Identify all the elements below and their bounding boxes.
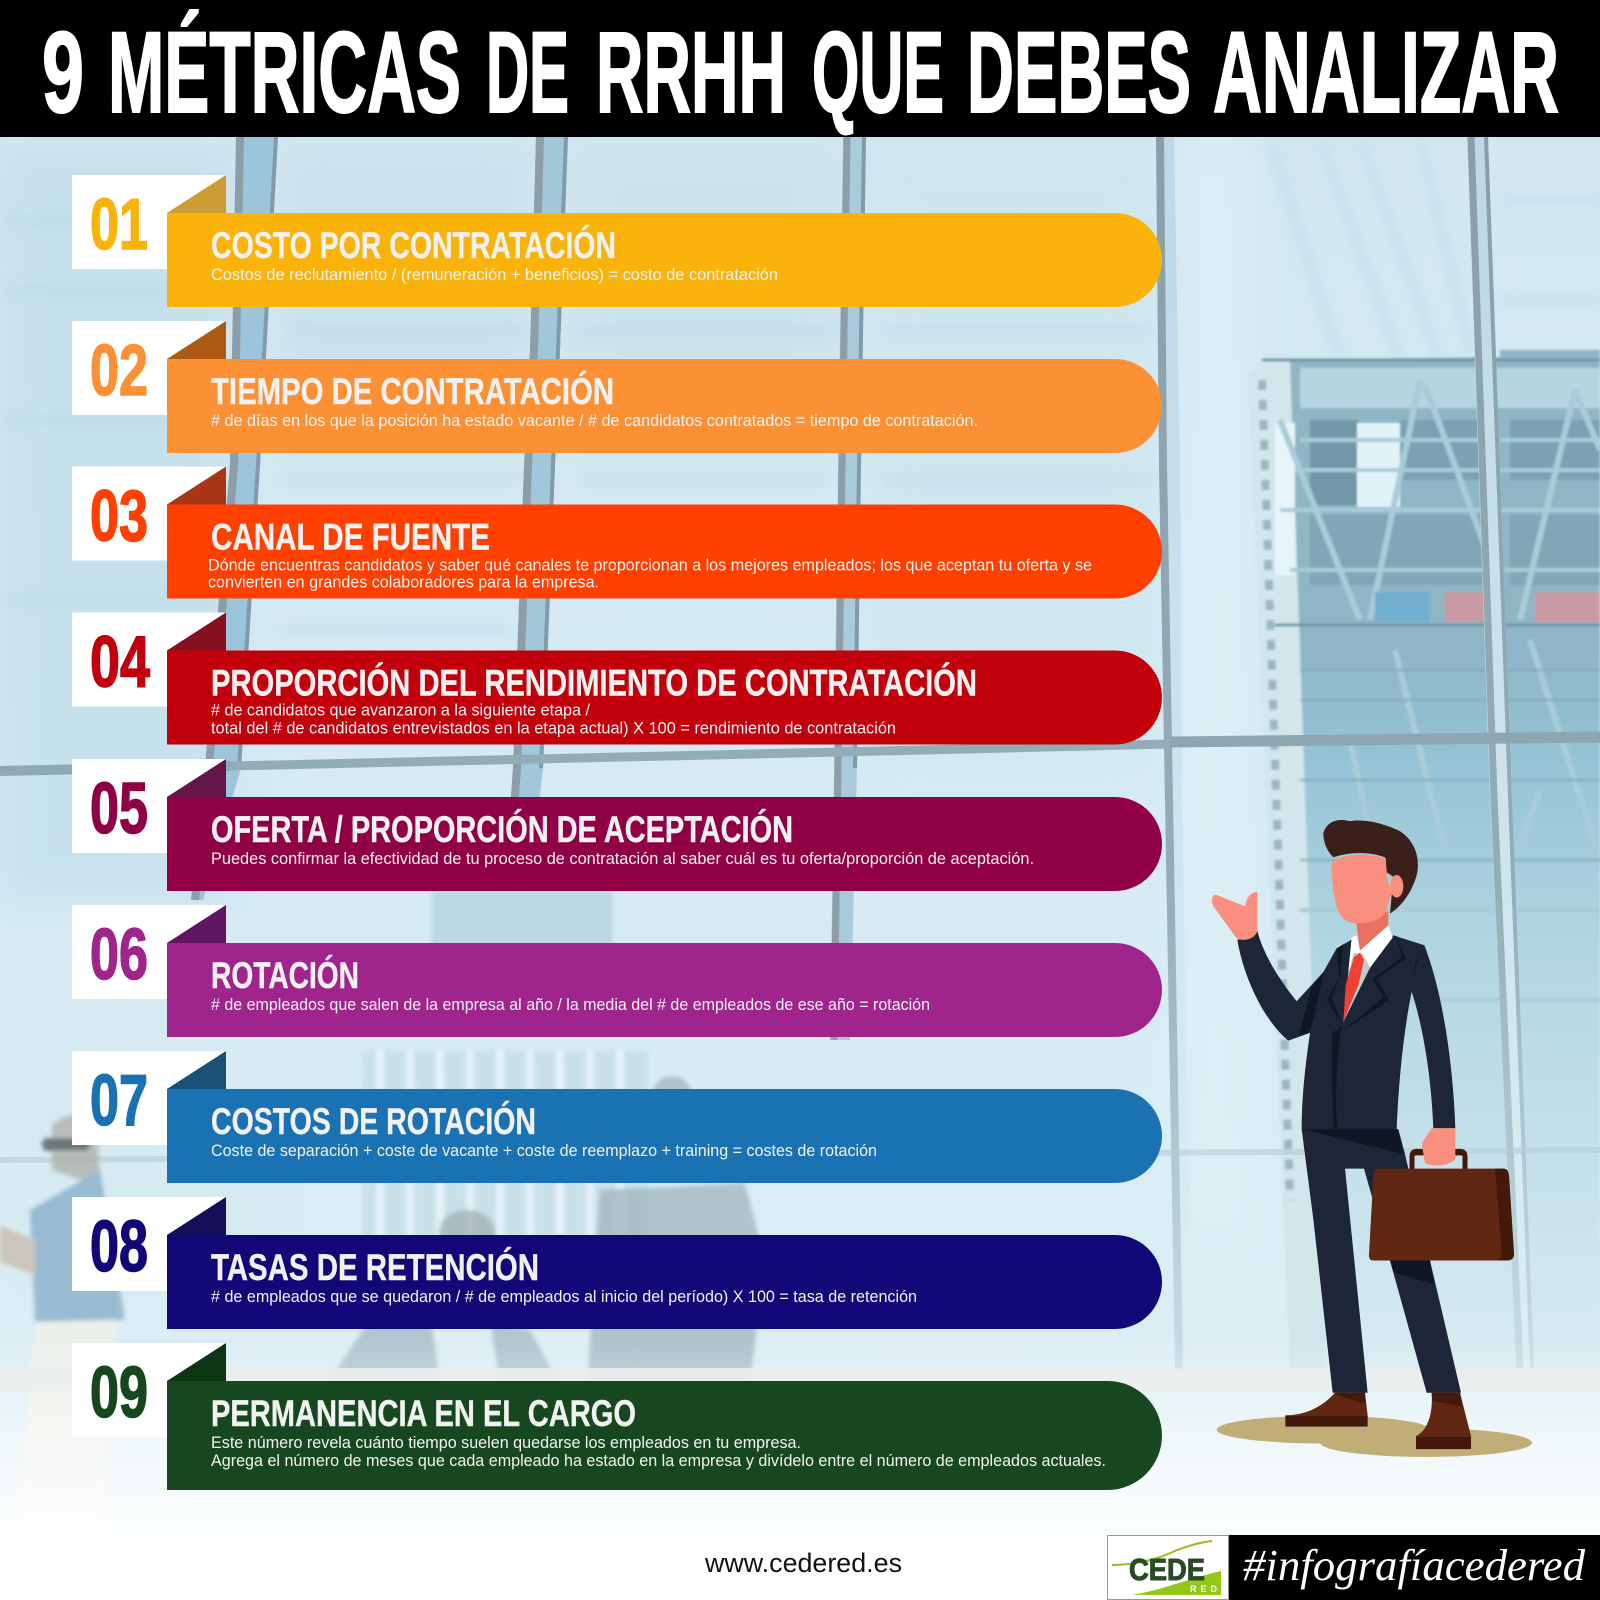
number card 07	[72, 1051, 226, 1145]
ribbon 06	[167, 943, 1162, 1037]
title band: QUE	[812, 9, 944, 137]
logo: CEDE RED	[1108, 1536, 1228, 1600]
ribbon 01: Costos de reclutamiento / (remuneración + beneficios) = costo de contratación	[211, 266, 778, 284]
number card 02: 02	[90, 331, 148, 411]
ribbon 03: Dónde encuentras candidatos y saber qué canales te proporcionan a los mejores empleados; los que aceptan tu oferta y se	[208, 556, 1092, 574]
number card 05: 05	[90, 769, 148, 849]
panel: metric 09 permanencia en el cargo	[72, 1343, 1162, 1490]
title band: RRHH	[596, 9, 786, 137]
website url: www.cedered.es	[704, 1548, 902, 1578]
ribbon 08: TASAS DE RETENCIÓN	[211, 1246, 539, 1288]
hashtag band	[1229, 1535, 1600, 1600]
ribbon 06: # de empleados que salen de la empresa al año / la media del # de empleados de ese año = rotación	[211, 996, 930, 1014]
ribbon 02	[167, 359, 1162, 453]
number card 01	[72, 175, 226, 269]
number card 08	[72, 1197, 226, 1291]
number card 04: 04	[90, 622, 150, 702]
ribbon 05: Puedes confirmar la efectividad de tu proceso de contratación al saber cuál es tu oferta/proporción de aceptación.	[211, 850, 1034, 868]
logo: CEDE RED: RED	[1190, 1584, 1218, 1594]
number card 09	[72, 1343, 226, 1437]
panel: metric 06 rotación	[72, 905, 1162, 1037]
people reflected in the window	[0, 1076, 765, 1560]
number card 06	[72, 905, 226, 999]
ribbon 09	[167, 1381, 1162, 1490]
panel: metric 01 costo por contratación	[72, 175, 1162, 307]
title band: DEBES	[967, 9, 1191, 137]
ribbon 09: Agrega el número de meses que cada empleado ha estado en la empresa y divídelo entre el número de empleados actuales.	[211, 1452, 1106, 1470]
number card 09: 09	[90, 1353, 148, 1433]
number card 08: 08	[90, 1207, 148, 1287]
number card 03	[72, 466, 226, 560]
ribbon 07	[167, 1089, 1162, 1183]
ribbon 03: CANAL DE FUENTE	[211, 516, 490, 558]
ribbon 08: # de empleados que se quedaron / # de empleados al inicio del período) X 100 = tasa de retención	[211, 1288, 917, 1306]
window frames	[0, 137, 1600, 1370]
ribbon 04	[167, 650, 1162, 744]
title band: MÉTRICAS	[108, 9, 461, 137]
number card 06: 06	[90, 915, 148, 995]
distant towers	[362, 890, 648, 1240]
number card 03: 03	[90, 476, 148, 556]
ribbon 04: total del # de candidatos entrevistados en la etapa actual) X 100 = rendimiento de contratación	[211, 720, 896, 738]
floor and fade to white	[0, 1368, 1600, 1392]
number card 02	[72, 321, 226, 415]
ribbon 01: COSTO POR CONTRATACIÓN	[211, 224, 616, 266]
title band: 9	[42, 9, 84, 137]
title band	[0, 0, 1600, 137]
ribbon 09: PERMANENCIA EN EL CARGO	[211, 1393, 636, 1434]
ribbon 02: # de días en los que la posición ha estado vacante / # de candidatos contratados = tiempo de contratación.	[211, 412, 978, 430]
ribbon 05	[167, 797, 1162, 891]
ribbon 04: # de candidatos que avanzaron a la siguiente etapa /	[211, 702, 590, 720]
panel: metric 02 tiempo de contratación	[72, 321, 1162, 453]
number card 01: 01	[90, 185, 148, 265]
panel: metric 05 oferta / proporción de aceptación	[72, 759, 1162, 891]
illustration: businessman with briefcase	[1212, 820, 1532, 1457]
number card 04	[72, 612, 226, 706]
panel: metric 04 proporción del rendimiento	[72, 612, 1162, 744]
ribbon 05: OFERTA / PROPORCIÓN DE ACEPTACIÓN	[211, 808, 793, 850]
hashtag band: #infografíacedered	[1243, 1541, 1586, 1590]
panel: metric 07 costos de rotación	[72, 1051, 1162, 1183]
ribbon 08	[167, 1235, 1162, 1329]
building reflection	[1248, 350, 1600, 1370]
ribbon 03: convierten en grandes colaboradores para la empresa.	[208, 574, 599, 592]
ribbon 06: ROTACIÓN	[211, 954, 359, 996]
panel: metric 08 tasas de retención	[72, 1197, 1162, 1329]
ribbon 07: Coste de separación + coste de vacante + coste de reemplazo + training = costes de rotación	[211, 1142, 877, 1160]
ribbon 01	[167, 213, 1162, 307]
ribbon 02: TIEMPO DE CONTRATACIÓN	[211, 370, 614, 412]
title band: DE	[486, 9, 569, 137]
number card 07: 07	[90, 1061, 148, 1141]
panel: metric 03 canal de fuente	[72, 466, 1162, 598]
logo: CEDE RED: CEDE	[1129, 1552, 1205, 1587]
ribbon 03	[167, 504, 1162, 598]
ribbon 04: PROPORCIÓN DEL RENDIMIENTO DE CONTRATACIÓN	[211, 662, 977, 704]
ribbon 09: Este número revela cuánto tiempo suelen quedarse los empleados en tu empresa.	[211, 1434, 801, 1452]
number card 05	[72, 759, 226, 853]
ribbon 07: COSTOS DE ROTACIÓN	[211, 1100, 536, 1142]
